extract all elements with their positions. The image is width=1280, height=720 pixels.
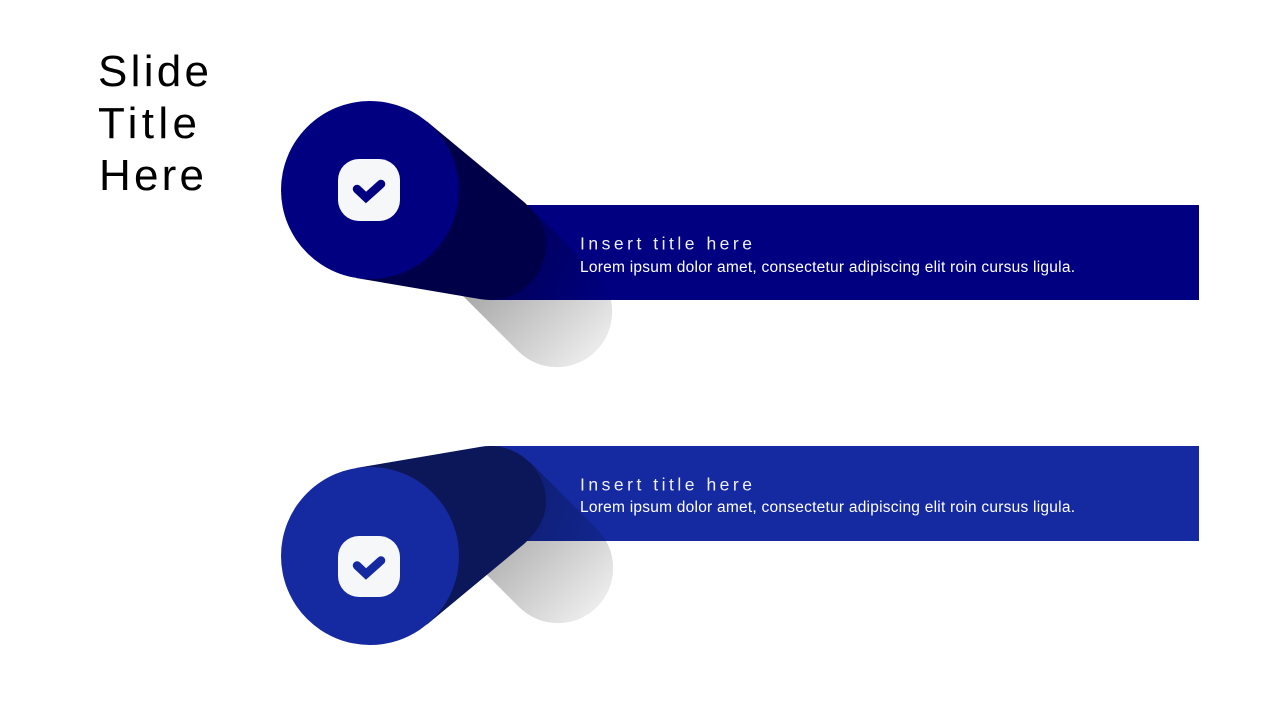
- item heading: Insert title here: [580, 474, 752, 494]
- item body text: Lorem ipsum dolor amet, consectetur adipiscing elit roin cursus ligula.: [580, 259, 1075, 276]
- title: [98, 47, 209, 200]
- dark cylinder body: [356, 122, 546, 300]
- capsule overlay on bar: [527, 462, 606, 541]
- banner bar: [490, 446, 1199, 541]
- circle: [281, 467, 459, 645]
- item body text: Lorem ipsum dolor amet, consectetur adipiscing elit roin cursus ligula.: [580, 499, 1075, 516]
- title: Slide: [98, 47, 209, 96]
- circle: [281, 101, 459, 279]
- item heading: Insert title here: [580, 234, 752, 254]
- gray shadow capsule: [440, 205, 612, 367]
- gray shadow capsule: [470, 462, 613, 623]
- icon: check mark: [338, 536, 400, 597]
- panel: bottom item: [281, 446, 1199, 645]
- title: Here: [99, 151, 204, 200]
- icon: check mark: [338, 159, 400, 221]
- panel: top item: [281, 101, 1199, 367]
- capsule overlay on bar: [500, 208, 596, 300]
- dark cylinder body: [356, 446, 546, 624]
- banner bar: [490, 205, 1199, 300]
- title: Title: [98, 99, 197, 148]
